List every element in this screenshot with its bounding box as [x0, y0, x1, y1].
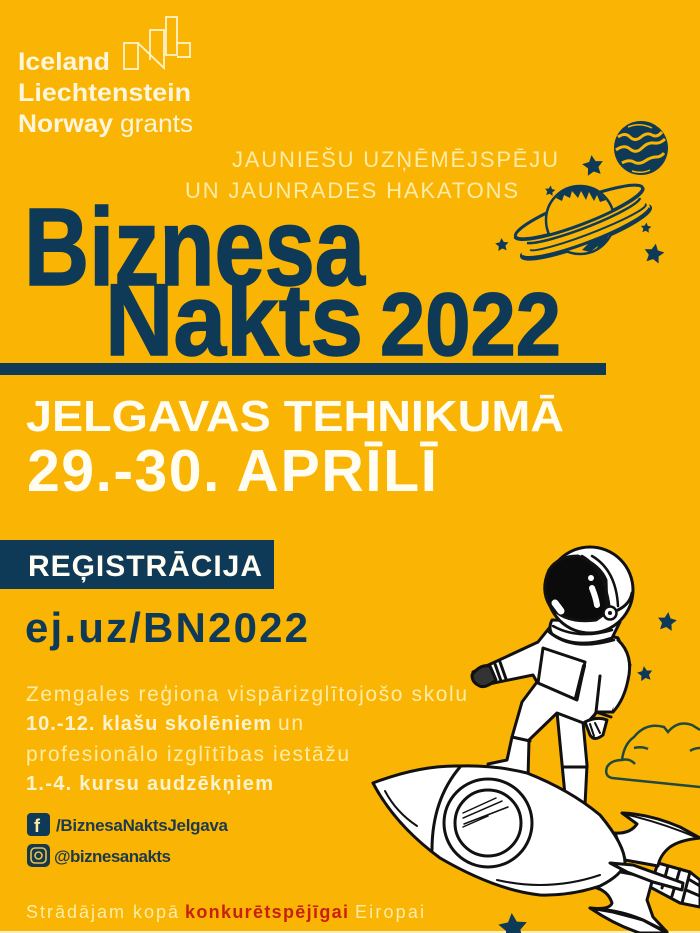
rocket nose line [432, 767, 460, 850]
icon: striped planet [614, 121, 668, 175]
logo: Iceland Liechtenstein Norway grants [18, 17, 193, 138]
title: Biznesa Nakts 2022: Nakts [105, 263, 363, 377]
registration banner [0, 540, 274, 589]
rocket [373, 766, 700, 933]
logo wordmark: Iceland [18, 48, 110, 76]
astronaut backpack edge [613, 640, 630, 712]
footer slogan: konkurētspējīgai [185, 902, 348, 922]
astronaut arm right and glove [593, 676, 611, 718]
logo wordmark: Norway [18, 110, 113, 138]
subtitle [185, 147, 558, 203]
footer slogan: Strādājam kopā [26, 902, 179, 922]
astronaut collar [550, 620, 620, 643]
title: Biznesa Nakts 2022: Biznesa [24, 186, 366, 309]
logo mark [124, 17, 190, 69]
subtitle: UN JAUNRADES HAKATONS [185, 178, 518, 203]
astronaut right leg [557, 712, 587, 805]
audience description: profesionālo izglītības iestāžu [26, 743, 349, 766]
title: Biznesa Nakts 2022 [24, 186, 561, 377]
astronaut [472, 547, 633, 805]
back rings [511, 176, 655, 268]
venue and date: 29.-30. APRĪLĪ [27, 438, 439, 504]
logo wordmark: Liechtenstein [18, 79, 191, 107]
registration banner: REĢISTRĀCIJA [28, 550, 262, 583]
icons: stars [495, 154, 678, 933]
icon: ringed planet [511, 176, 655, 268]
audience description: Zemgales reģiona vispārizglītojošo skolu [26, 683, 467, 706]
icon: facebook [27, 813, 50, 836]
astronaut body and left leg [473, 627, 630, 778]
planet body [546, 186, 614, 254]
title underline bar [0, 363, 606, 375]
astronaut glove left [472, 666, 496, 687]
registration link: ej.uz/BN2022 [25, 604, 308, 651]
audience description: 10.-12. klašu skolēniem [26, 713, 271, 735]
rocket hull [373, 766, 625, 895]
rocket exhaust [650, 863, 700, 907]
rocket lower fin [590, 870, 667, 932]
audience description: 1.-4. kursu audzēkņiem [26, 773, 273, 795]
instagram link [27, 844, 171, 867]
visor highlights [592, 588, 597, 605]
icon: facebook: f [34, 816, 41, 836]
front rings [515, 188, 650, 258]
astronaut helmet [547, 547, 633, 633]
subtitle: JAUNIEŠU UZŅĒMĒJSPĒJU [232, 147, 558, 172]
title: Biznesa Nakts 2022: 2022 [380, 274, 561, 374]
logo wordmark [18, 48, 193, 138]
venue and date [26, 392, 564, 504]
facebook link: /BiznesaNaktsJelgava [56, 816, 229, 835]
icon: instagram [27, 844, 50, 867]
audience description: un [278, 712, 303, 735]
icon: cloud [606, 724, 700, 787]
audience description [26, 683, 467, 795]
venue and date: JELGAVAS TEHNIKUMĀ [26, 392, 564, 441]
rocket centre fin [610, 863, 683, 890]
astronaut chest panel [538, 648, 585, 700]
rocket upper fin [615, 813, 700, 866]
footer slogan [26, 902, 424, 922]
logo wordmark: grants [120, 110, 193, 138]
instagram link: @biznesanakts [54, 847, 171, 866]
rocket window [444, 779, 532, 867]
footer slogan: Eiropai [355, 902, 424, 922]
